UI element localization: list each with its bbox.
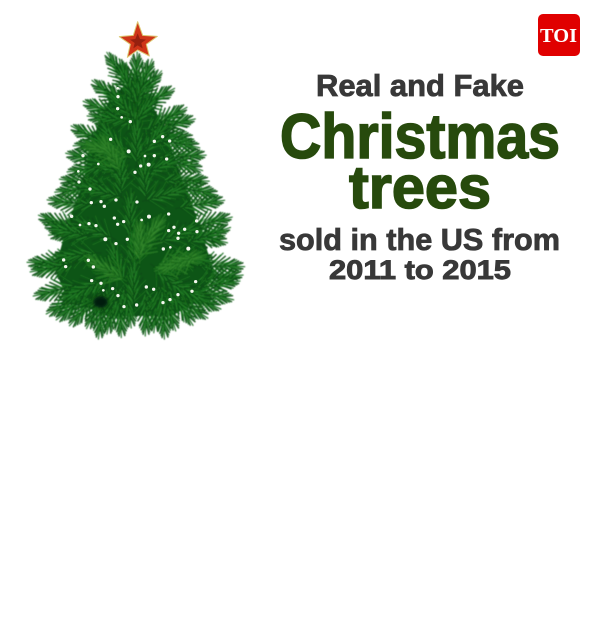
heading line: Real and Fake: Real and Fake	[316, 68, 524, 103]
tree foliage	[27, 45, 245, 340]
lighter foliage patches	[77, 127, 211, 293]
illustration: Christmas tree	[27, 22, 245, 340]
heading line: trees: trees	[349, 154, 491, 221]
dark shadow spot	[93, 296, 108, 308]
logo: TOI badge: TOI	[540, 25, 577, 47]
icon: star tree topper	[119, 22, 157, 57]
subheading line: sold in the US from: sold in the US from	[279, 222, 560, 257]
heading line: Christmas: Christmas	[280, 102, 560, 172]
logo: TOI badge	[538, 14, 580, 56]
subheading line: 2011 to 2015: 2011 to 2015	[329, 255, 511, 285]
fairy lights	[62, 87, 199, 308]
